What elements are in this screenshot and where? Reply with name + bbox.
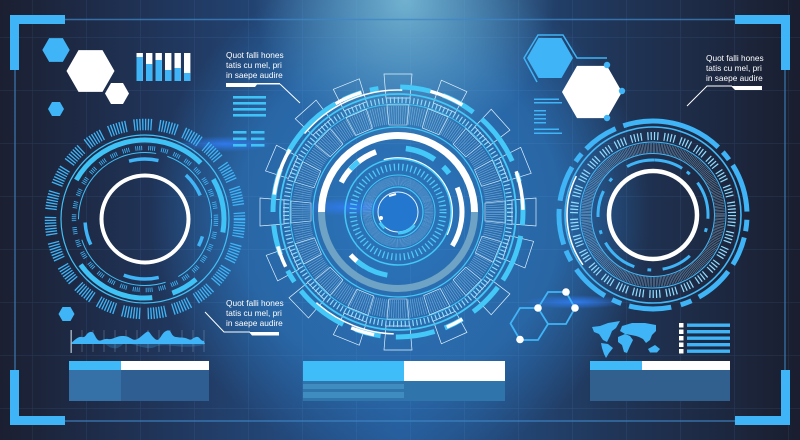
- world map: [592, 321, 660, 358]
- bar chart: top left: [136, 53, 190, 81]
- corner bracket: top left: [10, 15, 65, 70]
- callout: top left text: tatis cu mel, pri: [226, 60, 282, 70]
- hexagon: bottom left: [58, 307, 74, 321]
- progress panel: left: [69, 361, 209, 401]
- radial gauge: right: [533, 95, 773, 335]
- callout: bottom left text: [205, 298, 284, 336]
- callout: top right text: in saepe audire: [706, 73, 763, 83]
- progress panel: right: [590, 361, 730, 401]
- callout: top left text: Quot falli hones: [226, 50, 284, 60]
- callout: top right text: [687, 53, 764, 106]
- corner bracket: bottom right: [735, 370, 790, 425]
- radial gauge: center: [222, 36, 574, 388]
- inner frames: [291, 105, 505, 319]
- corner bracket: top right: [735, 15, 790, 70]
- callout: top right text: Quot falli hones: [706, 53, 764, 63]
- hexagon molecule: [510, 288, 579, 343]
- corner bracket: bottom left: [10, 370, 65, 425]
- radial gauge: left: [37, 111, 253, 327]
- callout: bottom left text: tatis cu mel, pri: [226, 308, 282, 318]
- area chart: [70, 330, 205, 353]
- callout: top left text: [226, 50, 300, 103]
- text lines icon: right: [534, 98, 562, 134]
- callout: bottom left text: Quot falli hones: [226, 298, 284, 308]
- hexagon cluster: top right: [524, 35, 625, 121]
- hexagon cluster: top left: [42, 38, 129, 116]
- callout: top right text: tatis cu mel, pri: [706, 63, 762, 73]
- outer frames: [260, 74, 536, 350]
- callout: top left text: in saepe audire: [226, 70, 283, 80]
- progress panel: center: [303, 361, 505, 401]
- callout: bottom left text: in saepe audire: [226, 318, 283, 328]
- map legend: [679, 323, 730, 354]
- text lines icon: left: [233, 96, 266, 147]
